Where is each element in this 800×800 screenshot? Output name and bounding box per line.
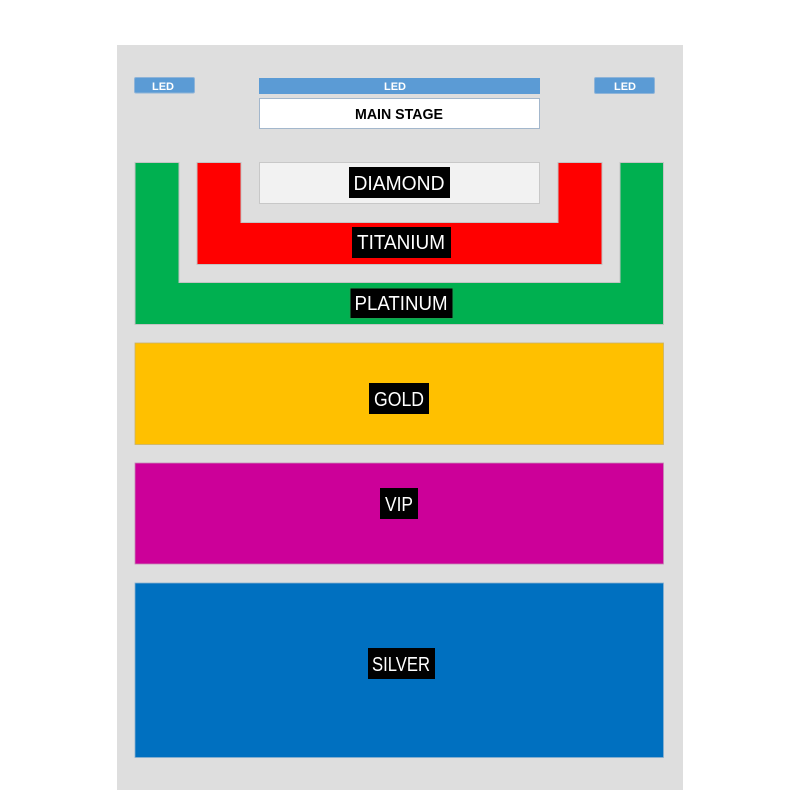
gold section: GOLD (374, 389, 424, 411)
right LED screen (594, 78, 654, 94)
left LED screen (134, 78, 194, 93)
VIP section: VIP (385, 494, 413, 516)
diamond section (260, 162, 540, 204)
centre LED screen (259, 78, 540, 94)
centre LED screen: LED (384, 81, 406, 93)
titanium section (197, 162, 602, 264)
left LED screen: LED (152, 81, 174, 93)
main stage: MAIN STAGE (355, 106, 443, 123)
platinum section (135, 162, 664, 324)
gold section (135, 343, 664, 444)
venue floor background (117, 45, 683, 790)
right LED screen: LED (614, 81, 636, 93)
silver section (135, 583, 664, 758)
silver section: SILVER (372, 654, 430, 676)
diamond section: DIAMOND (354, 173, 444, 195)
titanium section: TITANIUM (357, 232, 445, 254)
VIP section (135, 463, 664, 564)
main stage (260, 98, 540, 128)
platinum section: PLATINUM (354, 293, 448, 315)
